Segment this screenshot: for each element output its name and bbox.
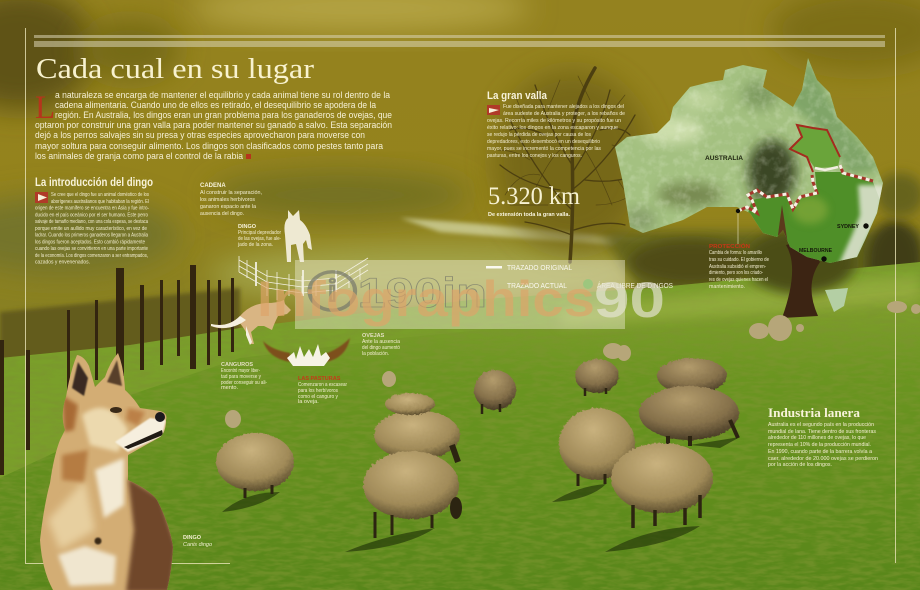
icon: white fence [239, 256, 368, 300]
map: Melbourne [799, 248, 832, 262]
section: La introducción del dingo: salvaje de tamaño mediano, con una cola espesa, se destaca [35, 219, 149, 225]
map: Melbourne: MELBOURNE [799, 248, 832, 254]
sheep 9 [559, 408, 635, 486]
section: La gran valla [487, 90, 625, 159]
label: ovejas: del dingo aumentó [362, 345, 400, 351]
sheep 1 [216, 433, 294, 498]
background: meadow [0, 260, 920, 590]
label: protección: tras su cuidado. El gobierno de [709, 257, 769, 263]
intro text block: a naturaleza se encarga de mantener el equilibrio y cada animal tiene su rol dentro de la [55, 90, 391, 101]
map of Australia [610, 55, 890, 312]
section: La gran valla: depredadores, esto desembocó en un desequilibrio [487, 139, 600, 145]
label: dingo: jado de la zona. [237, 242, 273, 248]
tree under the map [745, 230, 855, 318]
label: protección [709, 242, 769, 290]
section: La gran valla: pasturas, entre los conejos y los canguros. [487, 153, 582, 159]
section: Industria lanera: caer, alrededor de 20.000 ovejas se perdieron [768, 456, 878, 462]
label: protección: Cambia de forma: lo amarillo [709, 250, 762, 256]
sheep 7 [657, 358, 727, 394]
section: La gran valla: ovejas. Recorría miles de kilómetros y su propósito fue un [487, 118, 621, 124]
section: La introducción del dingo: La introducción del dingo [35, 177, 153, 189]
legend: dingo-free area: ÁREA LIBRE DE DINGOS [597, 281, 673, 290]
label: ovejas: la población. [362, 351, 389, 357]
section: La introducción del dingo: aborígenes australianos que habitaban la región. El [51, 199, 149, 205]
sheep flock [216, 301, 920, 552]
map: mainland with relief [610, 55, 890, 270]
dingo: inner ears [72, 362, 88, 396]
section: La introducción del dingo: cazados y envenenados. [35, 260, 90, 266]
watermark logo: Infographics [257, 271, 595, 327]
food chain labels: cadena: ganaron espacio ante la [200, 204, 257, 210]
background: brown field behind fence [0, 288, 240, 362]
food chain labels: cadena: CADENA [200, 183, 226, 189]
label: ovejas: OVEJAS [362, 333, 385, 339]
label: las pasturas: Comenzaron a escasear [298, 382, 347, 388]
map: label Australia: AUSTRALIA [705, 155, 743, 162]
label: protección: res de ovejas quienes hacen el [709, 277, 768, 283]
sheep 10 [611, 443, 713, 528]
food chain labels: cadena [200, 183, 262, 217]
section: La gran valla: se redujo la pérdida de ovejas por causa de los [487, 132, 591, 138]
map: red former fence line [790, 125, 840, 172]
tree behind La gran valla [494, 68, 650, 262]
icon: red arrow badge [487, 105, 500, 115]
map: dingo-free green area south-east [748, 172, 885, 265]
section: Industria lanera: mundial de lana. Tiene dentro de sus fronteras [768, 429, 876, 435]
sheep 3 [363, 451, 462, 538]
section: Industria lanera: alrededor de 110 millones de ovejas, lo que [768, 435, 866, 441]
watermark logo: 90 [594, 272, 665, 328]
section: La gran valla: La gran valla [487, 90, 548, 102]
sheep 8 [639, 386, 739, 446]
label: las pasturas [298, 376, 347, 405]
section: Industria lanera: representa el 10% de la producción mundial. [768, 442, 871, 448]
map: Sydney: SYDNEY [837, 224, 859, 230]
top rule bars [34, 35, 885, 47]
section: La introducción del dingo: ducido en el país oceánico por el ser humano. Este perro [35, 212, 148, 218]
intro text block: cadena alimentaria. Cuando uno de ellos es retirado, el desequilibrio se apodera de la [55, 100, 377, 111]
map: Sydney [837, 223, 869, 230]
section: Industria lanera [768, 405, 878, 468]
section: La gran valla: éxito relativo: los dingos en la zona escaparon y aunque [487, 125, 618, 131]
section: La introducción del dingo: los dingos fueron aceptados. Esto cambió rápidamente [35, 239, 145, 245]
dingo: face cream [82, 408, 128, 452]
map: red and white dashed fence line [738, 165, 873, 213]
sheep 4 [385, 393, 435, 415]
section: Industria lanera: En 1990, cuando parte de la barrera volvía a [768, 449, 873, 455]
label: las pasturas: la oveja. [298, 399, 319, 405]
intro text block: mayor soltura para conseguir alimento. Los dingos son clasificados como pestes tanto para [35, 141, 384, 152]
section: La introducción del dingo [35, 177, 153, 266]
intro text block: dejó a los perros salvajes sin su presa y otras especies aprovecharon para moverse con [35, 130, 365, 141]
label: canguros: poder conseguir su ali- [221, 380, 267, 386]
icon: white dingo silhouette [284, 210, 312, 262]
title: Cada cual en su lugar [36, 53, 314, 85]
stat: 5.320 km: 5.320 km [488, 183, 581, 210]
section: La introducción del dingo: porque emite un aullido muy característico, en vez de [35, 226, 147, 232]
map: Tasmania [825, 288, 848, 312]
sheep 2 [374, 410, 460, 462]
map: solid white fence section [815, 167, 838, 170]
caption: dingo: Canis dingo [183, 542, 212, 548]
legend [486, 265, 673, 290]
section: La gran valla: Fue diseñada para mantener alejados a los dingos del [503, 104, 624, 110]
fence posts [0, 265, 234, 475]
section: Industria lanera: Industria lanera [768, 405, 861, 420]
label: protección: PROTECCIÓN [709, 242, 750, 250]
dingo: brown flank [126, 478, 176, 590]
food chain labels: cadena: Al construir la separación, [200, 190, 262, 196]
sheep 6 [575, 359, 619, 396]
small distant sheep [225, 301, 920, 428]
label: ovejas: Ante la ausencia [362, 339, 401, 345]
section: La introducción del dingo: origen de este mamífero se encuentra en Asia y fue intro- [35, 206, 149, 212]
watermark panel [295, 260, 625, 329]
label: protección: mantenimiento. [709, 284, 745, 290]
drop cap: L [35, 90, 55, 126]
label: canguros: mento. [221, 385, 239, 391]
watermark logo: ⓘ190in [307, 269, 487, 316]
section: La gran valla: área sudeste de Australia y proteger, a los rebaños de [503, 111, 625, 117]
intro text block: región. En Australia, los dingos eran un gran problema para los ganaderos de ovejas, que [55, 110, 392, 121]
stat: 5.320 km: De extensión toda la gran valla. [488, 212, 570, 218]
section: La gran valla: mayor, pues se incrementó la competencia por las [487, 146, 601, 152]
label: protección: dimiento, pero son los criado- [709, 270, 763, 276]
label: canguros: tad para moverse y [221, 374, 261, 380]
dingo: pale chest and throat [95, 458, 124, 518]
section: La introducción del dingo: ladrar. Cuando los primeros ganaderos llegaron a Australia [35, 232, 149, 238]
label: canguros [221, 362, 267, 391]
label: dingo [237, 224, 281, 248]
label: dingo: de las ovejas, fue ale- [238, 236, 281, 242]
dingo: reddish patches [62, 395, 78, 432]
section: La introducción del dingo: cuando las ovejas se convirtieron en una parte importante [35, 246, 148, 252]
section: La introducción del dingo: Se cree que el dingo fue un animal doméstico de los [51, 192, 149, 198]
icon: kangaroo [211, 300, 291, 345]
map: fence end marker with leader [736, 209, 740, 244]
section: La introducción del dingo: de la economía. Los dingos comenzaron a ser entrampados, [35, 253, 148, 259]
watermark logo [257, 269, 665, 328]
intro text block: los animales de granja como para el control de la rabia [35, 151, 244, 162]
label: dingo: Principal depredador [238, 230, 281, 236]
icon: red arrow badge [35, 192, 48, 203]
caption: dingo [183, 535, 212, 548]
legend: original route: TRAZADO ORIGINAL [507, 265, 572, 272]
legend: current route: TRAZADO ACTUAL [507, 283, 567, 290]
sheep 5 [474, 370, 516, 414]
icon: brown arc and grass pasture [263, 338, 350, 366]
intro text block [35, 90, 392, 162]
dingo: base coat [35, 350, 180, 590]
label: las pasturas: LAS PASTURAS [298, 376, 341, 382]
dingo photo [35, 350, 180, 590]
map: enclosed green area north [790, 125, 840, 168]
section: Industria lanera: Australia es el segundo país en la producción [768, 422, 874, 428]
label: dingo: DINGO [238, 224, 257, 230]
food chain labels: cadena: los animales herbívoros [200, 197, 255, 203]
food chain labels: cadena: ausencia del dingo. [200, 211, 244, 217]
section: Industria lanera: por la acción de los dingos. [768, 462, 832, 468]
label: ovejas [362, 333, 401, 357]
sheep shadows [222, 437, 740, 552]
caption: dingo: DINGO [183, 535, 202, 541]
label: las pasturas: como el canguro y [298, 394, 338, 400]
label: canguros: Encontró mayor liber- [221, 368, 260, 374]
label: canguros: CANGUROS [221, 362, 253, 368]
label: las pasturas: para los herbívoros [298, 388, 338, 394]
label: protección: Australia subsidió el empren- [709, 264, 766, 270]
legend: dingo-free area [583, 279, 673, 290]
dingo: white muzzle [115, 418, 166, 452]
intro text block: optaron por construir una gran valla para poder mantener su ganado a salvo. Esta separación [35, 120, 392, 131]
